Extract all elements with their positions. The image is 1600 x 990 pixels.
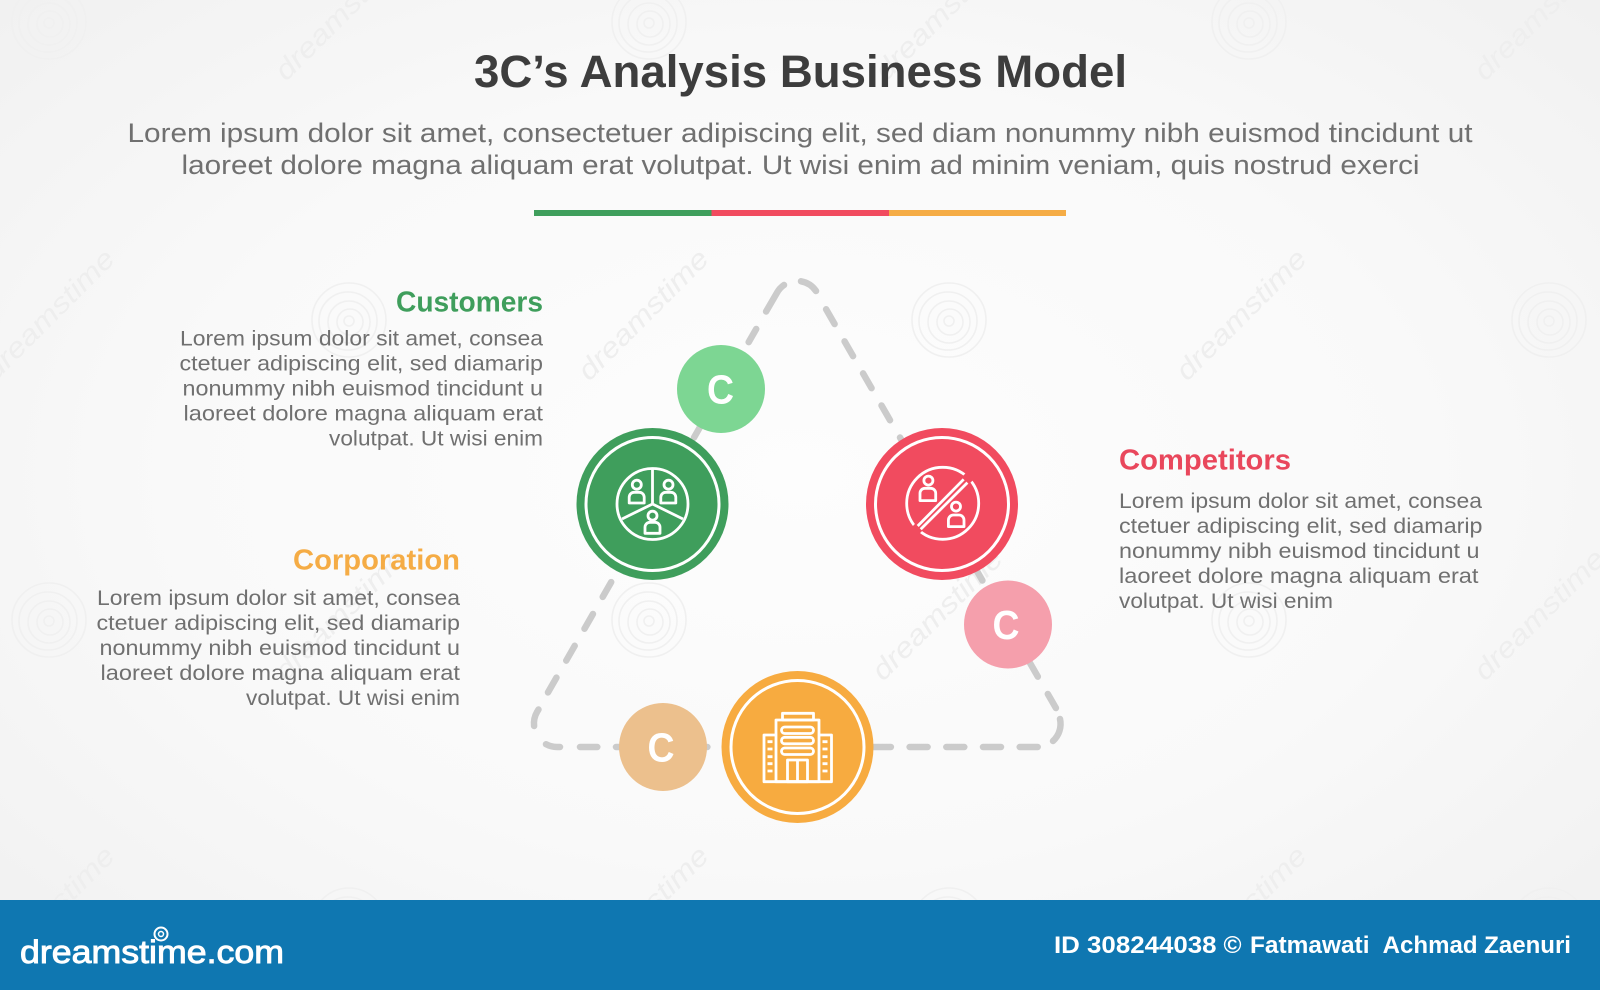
icon: competitors split <box>907 467 979 539</box>
node: customers <box>576 428 728 580</box>
tricolor divider <box>534 210 1066 216</box>
body: competitors: laoreet dolore magna aliquam erat <box>1119 564 1479 588</box>
watermark: dreamstime <box>1169 243 1313 386</box>
node: corporation <box>722 671 874 823</box>
small badge: customers C <box>677 345 765 433</box>
body: competitors: ctetuer adipiscing elit, sed diamarip <box>1119 514 1483 538</box>
body: competitors: Lorem ipsum dolor sit amet, consea <box>1119 489 1482 513</box>
heading: customers: Customers <box>396 286 543 318</box>
heading: corporation: Corporation <box>293 544 460 576</box>
body: corporation: nonummy nibh euismod tincidunt u <box>100 636 460 660</box>
footer banner <box>0 900 1600 990</box>
footer credit <box>1054 932 1571 959</box>
body: customers: ctetuer adipiscing elit, sed diamarip <box>180 352 543 376</box>
body: corporation: ctetuer adipiscing elit, sed diamarip <box>96 611 460 635</box>
body: customers: volutpat. Ut wisi enim <box>329 426 543 450</box>
footer logo: dreamstime.com <box>20 934 284 970</box>
watermark: dreamstime <box>571 243 715 386</box>
body: customers: laoreet dolore magna aliquam erat <box>184 402 543 426</box>
heading: competitors: Competitors <box>1119 444 1291 476</box>
body: competitors: nonummy nibh euismod tincidunt u <box>1119 539 1480 563</box>
body: customers: nonummy nibh euismod tincidunt u <box>182 376 543 400</box>
watermark: dreamstime <box>571 840 715 983</box>
small badge: corporation C: C <box>648 724 674 770</box>
body: customers: Lorem ipsum dolor sit amet, consea <box>180 326 543 350</box>
watermark: dreamstime <box>865 543 1009 686</box>
subtitle: Lorem ipsum dolor sit amet, consectetuer adipiscing elit, sed diam nonummy nibh euismod tincidunt ut <box>128 118 1473 148</box>
footer credit: Fatmawati <box>1250 932 1370 959</box>
panel: customers text <box>180 286 543 450</box>
watermark: dreamstime <box>1169 840 1313 983</box>
watermark: dreamstime <box>268 543 412 686</box>
body: competitors: volutpat. Ut wisi enim <box>1119 589 1333 613</box>
footer credit: Achmad Zaenuri <box>1383 932 1571 959</box>
subtitle <box>128 118 1473 180</box>
footer credit: ID 308244038 <box>1054 932 1216 959</box>
small badge: customers C: C <box>707 366 734 412</box>
icon: office building <box>764 713 832 782</box>
icon: customer segments pie <box>617 468 688 540</box>
body: corporation <box>96 586 460 710</box>
subtitle: laoreet dolore magna aliquam erat volutpat. Ut wisi enim ad minim veniam, quis nostrud exerci <box>182 150 1420 180</box>
body: customers <box>180 326 543 450</box>
panel: competitors text <box>1119 444 1483 613</box>
body: corporation: Lorem ipsum dolor sit amet, consea <box>97 586 460 610</box>
body: corporation: volutpat. Ut wisi enim <box>246 686 460 710</box>
node: competitors <box>866 428 1018 580</box>
footer credit: © <box>1224 932 1242 959</box>
watermark: dreamstime <box>1467 543 1600 686</box>
small badge: competitors C: C <box>992 602 1020 648</box>
title: 3C’s Analysis Business Model <box>474 46 1127 97</box>
dashed triangle cycle <box>534 281 1061 747</box>
panel: corporation text <box>96 544 460 710</box>
body: corporation: laoreet dolore magna aliquam erat <box>100 661 460 685</box>
small badge: corporation C <box>619 703 707 791</box>
small badge: competitors C <box>964 580 1052 668</box>
body: competitors <box>1119 489 1483 613</box>
